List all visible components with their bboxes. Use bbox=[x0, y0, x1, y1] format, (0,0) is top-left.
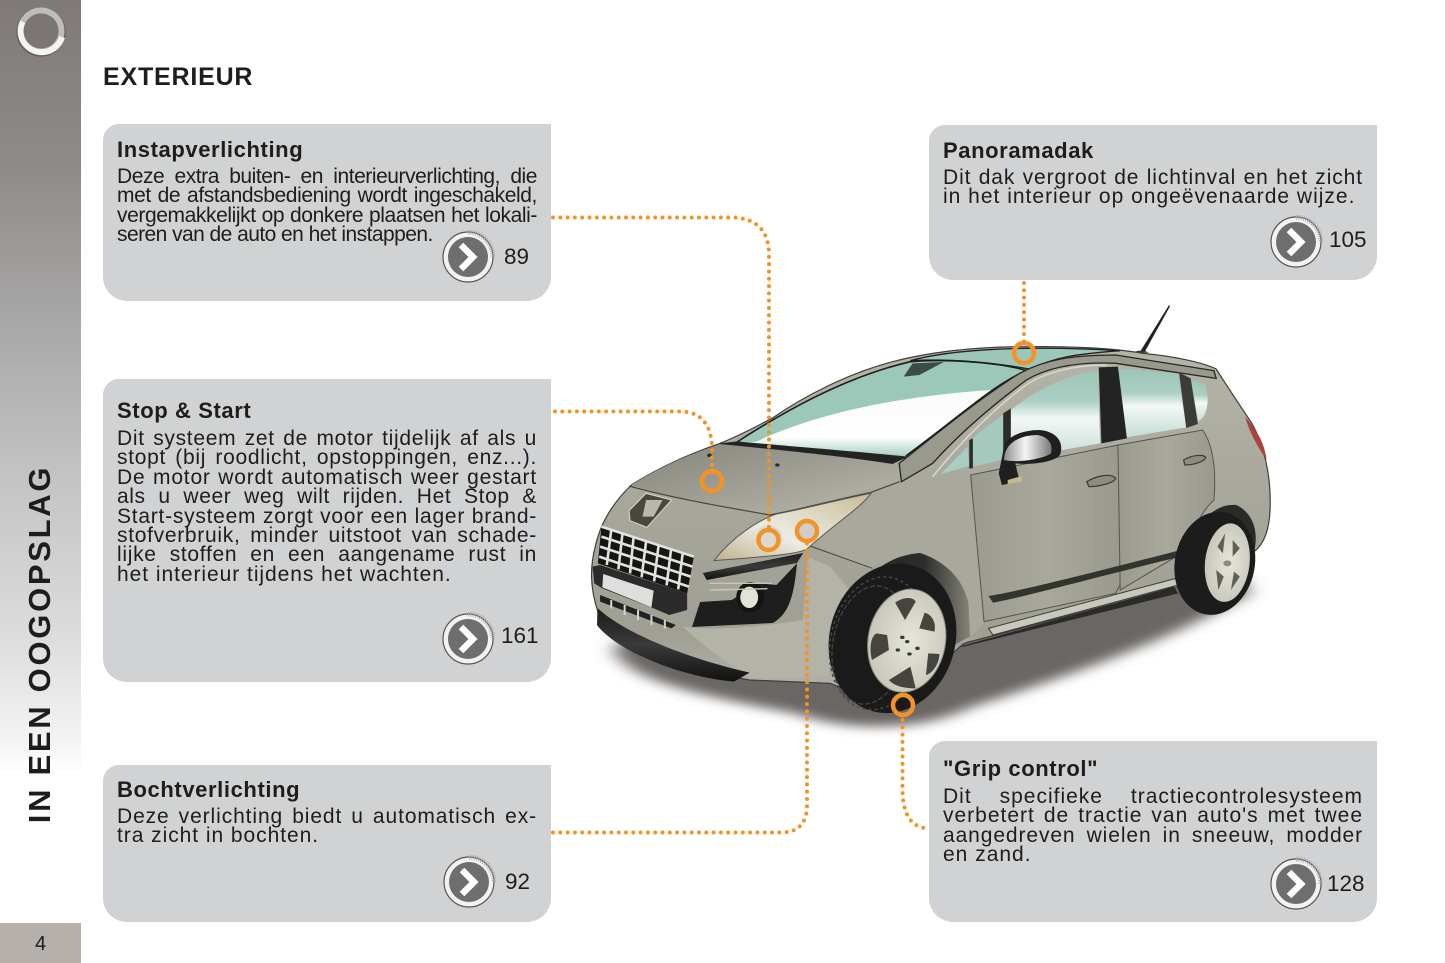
front bumper light bbox=[683, 557, 852, 678]
page reference: 128 bbox=[1327, 871, 1365, 896]
icon: arrow page reference bbox=[443, 855, 496, 908]
icon: sidebar ring logo bbox=[16, 8, 66, 56]
page number box bbox=[0, 923, 81, 963]
body text: Deze extra buiten- en interieurverlichting, die bbox=[117, 165, 537, 188]
sill bbox=[988, 578, 1178, 635]
body text bbox=[943, 785, 1363, 866]
body text: aangedreven wielen in sneeuw, modder bbox=[943, 824, 1363, 847]
wheel arch front bbox=[848, 553, 970, 707]
body text bbox=[117, 427, 537, 586]
body text: Dit systeem zet de motor tijdelijk af als u bbox=[117, 427, 537, 450]
heading: Stop & Start bbox=[117, 398, 251, 423]
body text: Start-systeem zorgt voor een lager brand- bbox=[117, 505, 537, 528]
panel: Instapverlichting bbox=[103, 124, 551, 301]
body text: Dit dak vergroot de lichtinval en het zicht bbox=[943, 166, 1363, 189]
door panels bbox=[971, 445, 1122, 622]
body text: lijke stoffen en een aangename rust in bbox=[117, 543, 537, 566]
antenna bbox=[1131, 305, 1170, 353]
car illustration bbox=[590, 305, 1271, 734]
icon: arrow page reference bbox=[442, 612, 495, 665]
target ring: left headlight bbox=[758, 530, 778, 550]
body text bbox=[943, 166, 1363, 208]
heading: Panoramadak bbox=[943, 138, 1094, 163]
body text bbox=[117, 805, 537, 847]
front grille bbox=[592, 527, 694, 628]
leader: Panoramadak bbox=[1022, 283, 1026, 342]
sidebar gradient bbox=[0, 0, 81, 775]
front wheel bbox=[819, 559, 966, 718]
front air intake and fog lamp bbox=[692, 553, 803, 627]
page reference: 161 bbox=[501, 623, 539, 648]
door mirror bbox=[999, 430, 1061, 485]
icon: arrow page reference bbox=[1270, 215, 1323, 268]
target ring: front tyre bbox=[893, 695, 913, 715]
panel: Grip control bbox=[929, 741, 1377, 922]
icon: arrow page reference bbox=[1270, 857, 1323, 910]
heading: "Grip control" bbox=[943, 756, 1098, 781]
rear light bbox=[1245, 417, 1267, 460]
windshield bbox=[719, 361, 1026, 464]
page reference: 92 bbox=[505, 869, 530, 894]
body text: met de afstandsbediening wordt ingeschakeld, bbox=[117, 184, 537, 207]
wheel arch rear bbox=[1178, 505, 1256, 600]
hood nozzles bbox=[707, 454, 780, 467]
panel: Stop and Start bbox=[103, 379, 551, 682]
body text: het interieur tijdens het wachten. bbox=[117, 563, 452, 586]
lower bumper bbox=[597, 608, 750, 682]
heading: Instapverlichting bbox=[117, 137, 303, 162]
door handles bbox=[1087, 475, 1116, 487]
panel: Bochtverlichting bbox=[103, 765, 551, 922]
body text bbox=[117, 165, 537, 246]
heading: Bochtverlichting bbox=[117, 777, 300, 802]
target ring: hood bbox=[702, 471, 722, 491]
body text: stopt (bij roodlicht, opstoppingen, enz...). bbox=[117, 446, 537, 469]
side windows bbox=[941, 367, 1208, 474]
headlight bbox=[714, 493, 871, 561]
icon: arrow page reference bbox=[442, 230, 495, 283]
body text: seren van de auto en het instappen. bbox=[117, 223, 433, 246]
leader: Stop and Start bbox=[555, 412, 712, 470]
page reference: 105 bbox=[1329, 227, 1367, 252]
hood bbox=[631, 444, 901, 515]
target ring: right headlight bbox=[797, 521, 817, 541]
leader: Grip control bbox=[902, 720, 925, 828]
title: EXTERIEUR bbox=[103, 63, 253, 91]
A-pillar and roof rail bbox=[899, 355, 1216, 482]
body text: Deze verlichting biedt u automatisch ex- bbox=[117, 805, 537, 828]
rear wheel bbox=[1169, 509, 1261, 617]
ground shadow bbox=[613, 517, 1250, 727]
body text: en zand. bbox=[943, 843, 1032, 866]
page reference: 89 bbox=[504, 244, 529, 269]
body text: in het interieur op ongeëvenaarde wijze. bbox=[943, 185, 1355, 208]
body text: vergemakkelijkt op donkere plaatsen het lokali- bbox=[117, 204, 537, 227]
body text: verbetert de tractie van auto's met twee bbox=[943, 804, 1363, 827]
car body bbox=[592, 347, 1270, 707]
door rub strip bbox=[988, 548, 1188, 603]
vertical heading: IN EEN OOGOPSLAG: IN EEN OOGOPSLAG bbox=[22, 465, 57, 823]
body text: Dit specifieke tractiecontrolesysteem bbox=[943, 785, 1363, 808]
body text: De motor wordt automatisch weer gestart bbox=[117, 466, 537, 489]
peugeot badge bbox=[629, 493, 672, 527]
target ring: roof bbox=[1014, 343, 1034, 363]
leader: Bochtverlichting bbox=[553, 542, 807, 832]
leader: Instapverlichting bbox=[553, 218, 769, 528]
panoramic roof glass bbox=[910, 348, 1120, 369]
body text: als u weer weg wilt rijden. Het Stop & bbox=[117, 485, 537, 508]
panel: Panoramadak bbox=[929, 125, 1377, 280]
front fender light bbox=[817, 477, 984, 643]
body text: tra zicht in bochten. bbox=[117, 824, 319, 847]
page number box: 4 bbox=[35, 933, 46, 955]
body text: stofverbruik, minder uitstoot van schade- bbox=[117, 524, 537, 547]
